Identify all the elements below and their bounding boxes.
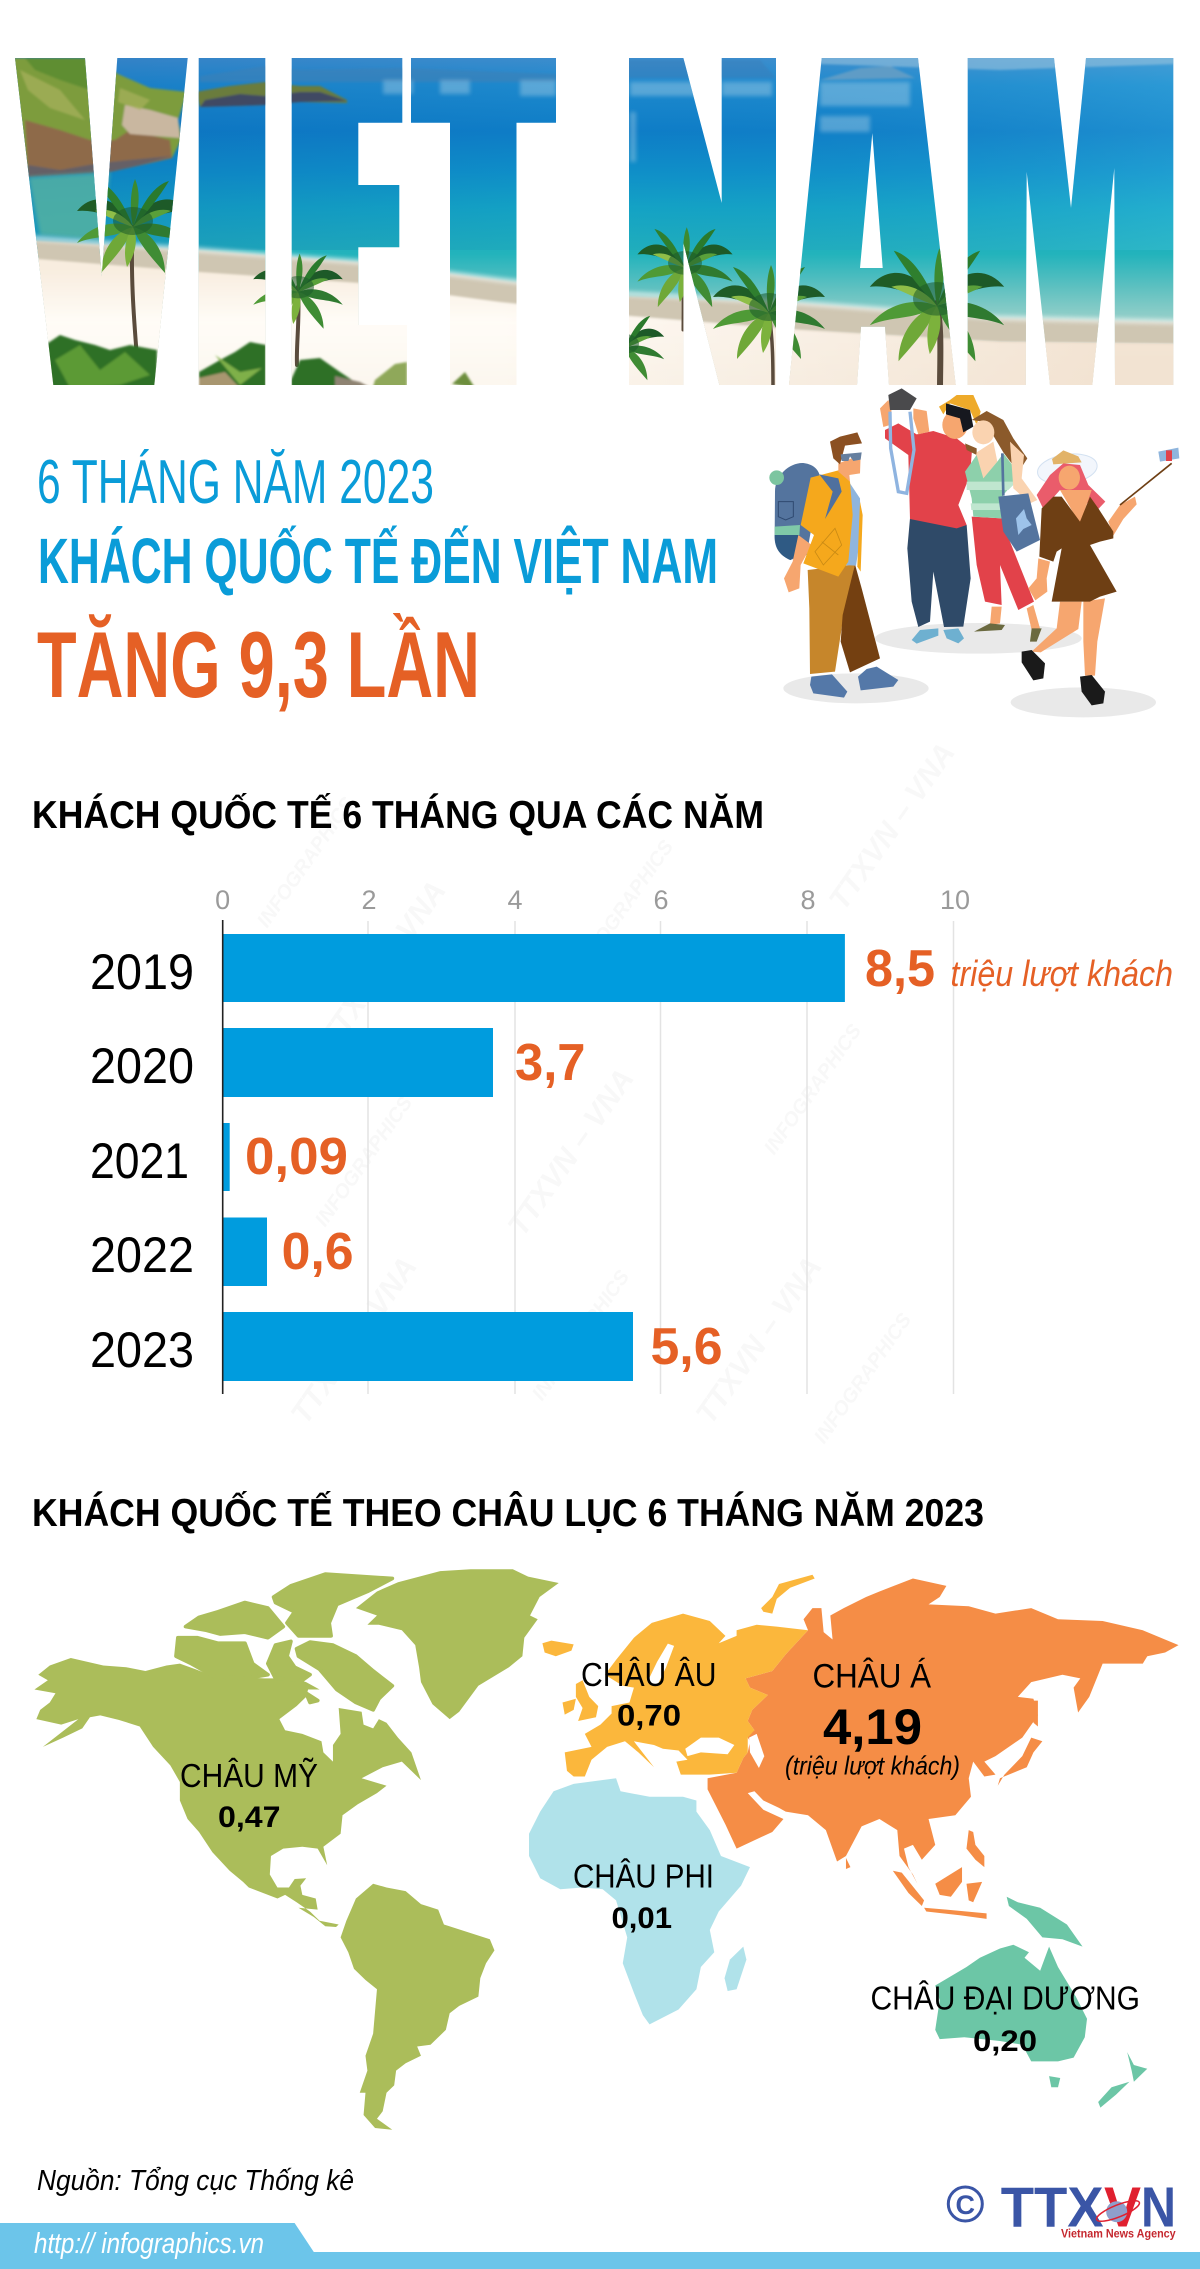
watermarks: TTXVN – VNA — [314, 875, 453, 1054]
map label: Asia: CHÂU Á — [812, 1658, 931, 1696]
map label: Europe — [581, 1656, 716, 1732]
watermarks: TTXVN – VNA — [502, 1063, 641, 1242]
value labels: 8,5 — [865, 940, 935, 998]
year labels: 2019 — [90, 944, 194, 1000]
watermarks: TTXVN – VNA — [823, 737, 962, 916]
watermarks — [253, 737, 962, 1448]
map label: Europe: 0,70 — [617, 1700, 681, 1732]
value labels: 0,6 — [282, 1223, 354, 1281]
tourist with backpack — [769, 432, 898, 698]
map label: Asia — [785, 1658, 960, 1780]
tourist taking a selfie — [1022, 448, 1179, 705]
heading: map section: KHÁCH QUỐC TẾ THEO CHÂU LỤC 6 THÁNG NĂM 2023 — [32, 1490, 984, 1535]
year labels: 2021 — [90, 1133, 189, 1189]
map: Africa — [529, 1778, 750, 2024]
map: Asia — [708, 1578, 1179, 1919]
watermarks: INFOGRAPHICS — [253, 793, 359, 932]
year labels: 2022 — [90, 1227, 194, 1283]
heading: khách quốc tế đến Việt Nam: KHÁCH QUỐC TẾ ĐẾN VIỆT NAM — [38, 524, 718, 597]
logo: TTXVN: N — [1141, 2176, 1176, 2240]
map: Americas — [34, 1569, 559, 2130]
axis labels: 6 — [653, 885, 669, 915]
axis labels — [215, 885, 970, 915]
map label: Oceania — [870, 1980, 1140, 2058]
map label: Americas — [180, 1757, 318, 1834]
axis labels: 2 — [361, 885, 377, 915]
axis labels: 4 — [507, 885, 523, 915]
map label: Africa — [573, 1858, 714, 1935]
watermarks: INFOGRAPHICS — [760, 1020, 866, 1159]
bar chart: visitors by year — [90, 885, 1173, 1394]
axis labels: 10 — [940, 885, 970, 915]
map label: Africa: CHÂU PHI — [573, 1858, 714, 1894]
map label: Africa: 0,01 — [612, 1902, 672, 1935]
source note: Nguồn: Tổng cục Thống kê — [37, 2165, 354, 2197]
footer url: http:// infographics.vn — [34, 2228, 264, 2260]
value labels: 0,09 — [245, 1128, 348, 1186]
year labels: 2020 — [90, 1038, 194, 1094]
value labels — [245, 940, 935, 1376]
map label: Oceania: 0,20 — [973, 2025, 1037, 2058]
value labels: 5,6 — [650, 1318, 722, 1376]
logo: TTXVN: Vietnam News Agency — [1061, 2226, 1176, 2240]
map label: Oceania: CHÂU ĐẠI DƯƠNG — [870, 1980, 1140, 2016]
logo: TTXVN: V — [1104, 2176, 1141, 2240]
watermarks: INFOGRAPHICS — [311, 1092, 417, 1231]
tourist with tote bag — [965, 411, 1042, 642]
heading: bar chart section: KHÁCH QUỐC TẾ 6 THÁNG QUA CÁC NĂM — [32, 792, 764, 837]
value labels: 3,7 — [515, 1034, 586, 1092]
heading: 6 tháng năm 2023: 6 THÁNG NĂM 2023 — [37, 448, 434, 517]
axis labels: 0 — [215, 885, 230, 915]
heading: tăng 9,3 lần: TĂNG 9,3 LẦN — [37, 612, 480, 717]
logo: TTXVN: TTX — [1001, 2176, 1104, 2240]
map label: Asia: 4,19 — [823, 1699, 922, 1755]
watermarks: INFOGRAPHICS — [810, 1309, 916, 1448]
tourist with camera — [880, 388, 981, 644]
illustration: group of tourists — [769, 388, 1179, 717]
map label: Asia: (triệu lượt khách) — [785, 1750, 960, 1780]
logo: TTXVN — [948, 2176, 1176, 2240]
axis labels: 8 — [800, 885, 816, 915]
watermarks: TTXVN – VNA — [690, 1251, 829, 1430]
year labels — [90, 944, 194, 1378]
unit label: triệu lượt khách — [950, 953, 1173, 994]
watermarks: INFOGRAPHICS — [572, 836, 678, 975]
arctic islands — [176, 1574, 392, 1710]
shadow ellipses — [783, 623, 1156, 717]
map label: Europe: CHÂU ÂU — [581, 1656, 716, 1693]
footer bar — [0, 2223, 1200, 2269]
map label: Americas: 0,47 — [218, 1801, 280, 1834]
logo: TTXVN: C — [956, 2190, 975, 2220]
map label: Americas: CHÂU MỸ — [180, 1757, 318, 1794]
bars — [223, 934, 845, 1381]
watermarks: INFOGRAPHICS — [528, 1266, 634, 1405]
map: Europe — [542, 1575, 815, 1776]
map: Oceania — [935, 1897, 1147, 2108]
year labels: 2023 — [90, 1322, 194, 1378]
title: VIET NAM photo-filled letters — [0, 50, 1200, 395]
watermarks: TTXVN – VNA — [285, 1251, 424, 1430]
